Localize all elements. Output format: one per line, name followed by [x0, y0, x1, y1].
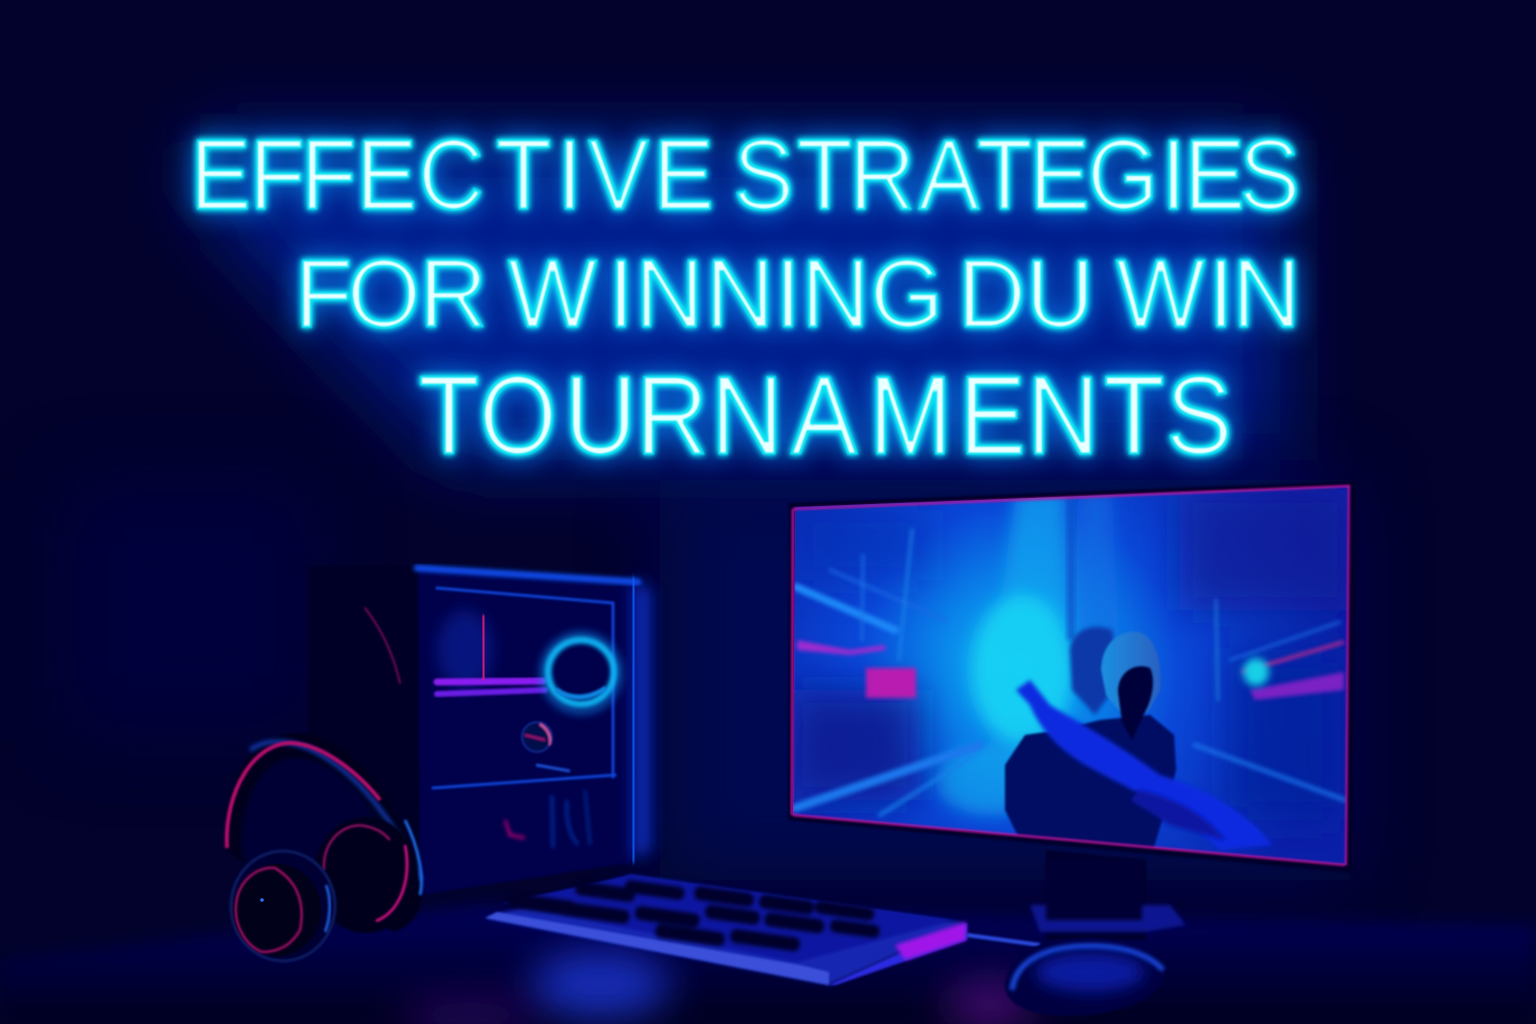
keyboard keys — [505, 879, 880, 952]
fighter torso — [1005, 715, 1176, 860]
fighter arm — [1016, 680, 1272, 850]
screen fighters — [1005, 627, 1272, 860]
screen background — [793, 486, 1349, 865]
fighter second head — [1070, 627, 1120, 715]
headband — [226, 733, 422, 932]
tower front frame — [417, 568, 638, 890]
tower front panel — [418, 567, 638, 895]
keyboard side purple — [829, 923, 967, 985]
title: TOURNAMENTS — [418, 352, 1233, 478]
keyboard deck — [502, 875, 953, 962]
headband blue rim — [250, 742, 421, 880]
pc tower — [308, 566, 650, 895]
tower purple shelf — [437, 681, 545, 694]
headband pink line — [227, 743, 380, 848]
screen magenta lights — [797, 640, 1344, 700]
fighter visor — [1118, 666, 1153, 740]
tower lower lights — [505, 790, 590, 848]
keyboard case — [485, 875, 967, 985]
screen dark edges — [790, 490, 1350, 820]
tower pink light strips — [328, 600, 484, 735]
tower panel sheen — [437, 610, 493, 690]
headphones — [226, 733, 422, 961]
fighter helmet — [1101, 632, 1160, 712]
tower small orb — [522, 722, 570, 771]
screen cyan orb — [1243, 658, 1269, 686]
screen dark column line — [1067, 490, 1075, 640]
mouse cable — [967, 935, 1040, 945]
keyboard — [485, 875, 967, 985]
right ear cup — [314, 817, 421, 933]
monitor stand — [1030, 850, 1186, 940]
monitor frame — [788, 481, 1357, 873]
tower side panel — [308, 566, 420, 895]
mouse highlight — [1012, 946, 1163, 990]
tower cooling fan ring — [543, 635, 619, 711]
mouse top sheen — [1035, 952, 1145, 992]
tower ambient glow — [634, 580, 650, 860]
monitor screen — [793, 486, 1349, 865]
title: FOR WINNING DU WIN — [294, 240, 1301, 348]
monitor — [780, 470, 1360, 940]
keyboard front edge — [485, 912, 829, 985]
desk surface — [0, 905, 1536, 1024]
mouse body — [1005, 938, 1166, 1016]
fighter lower arm — [1130, 790, 1225, 840]
left ear cup — [231, 851, 335, 961]
title: EFFECTIVE STRATEGIES — [190, 119, 1300, 231]
screen road beams — [795, 530, 1345, 815]
screen light column — [935, 490, 1120, 815]
headband inner cut-out — [242, 758, 385, 880]
mouse — [967, 935, 1166, 1016]
title — [190, 119, 1301, 478]
monitor magenta trim — [792, 486, 1350, 865]
